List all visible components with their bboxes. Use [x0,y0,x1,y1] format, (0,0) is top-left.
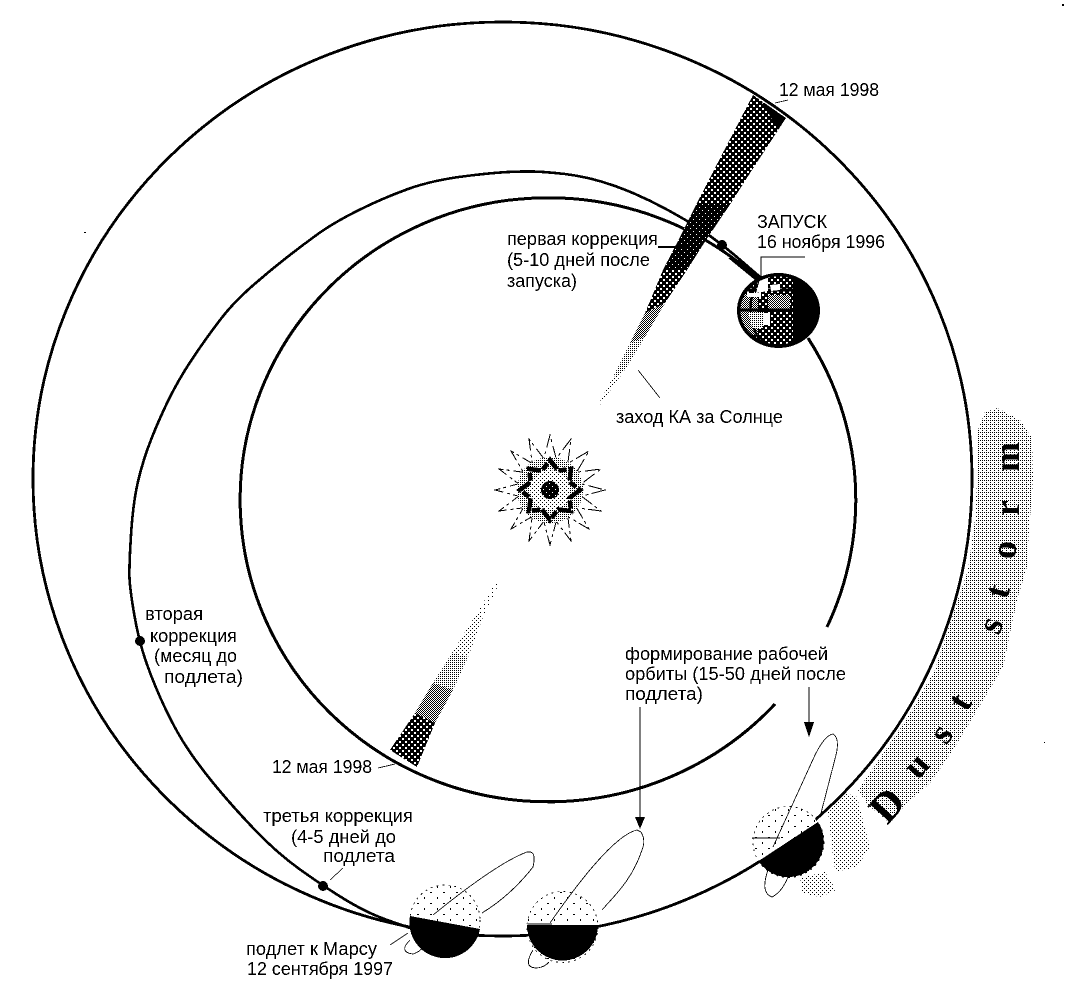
label: Dust storm: m [987,442,1027,472]
Earth orbit [240,198,856,802]
label: working orbit: формирование рабочей [625,644,828,664]
label: first correction: запуска) [507,271,577,291]
icon: Mars with orbit, third position [752,734,837,897]
arrow: working orbit to Mars 2 [635,707,645,829]
marker: third correction [318,881,328,891]
dust storm shading [800,408,1033,897]
label: second correction [145,604,243,687]
label: third correction: (4-5 дней до [291,827,396,847]
label: launch: ЗАПУСК [757,212,827,232]
marker: first correction [717,240,727,250]
label: Dust storm: s [920,716,961,750]
label: first correction [507,229,685,291]
label: Mars arrival: 12 сентября 1997 [247,959,393,979]
label: Dust storm: t [939,686,980,717]
label: Mars arrival [246,933,408,979]
icon: sun [495,435,605,545]
label: passage behind Sun: заход КА за Солнце [616,407,783,427]
label: Dust storm: D [860,779,915,832]
label: passage behind Sun [616,370,783,427]
icon: Mars with orbit, second position [527,830,644,968]
label: Dust storm: s [969,611,1011,639]
solar conjunction band: lower [390,583,499,767]
label: Dust storm: t [976,580,1018,602]
label: second correction: (месяц до [154,646,237,666]
label: working orbit: орбиты (15-50 дней после [625,664,846,684]
label: first correction: первая коррекция [507,229,658,249]
launch wedge where trajectories merge [728,258,760,280]
label: working orbit: подлета) [625,684,703,704]
transfer trajectory [129,171,760,928]
label: date top: 12 мая 1998 [779,80,879,100]
arrow: working orbit to Mars 3 [804,687,814,737]
label: Dust storm: u [894,744,937,786]
label: Dust storm: r [987,500,1027,516]
label: date bottom: 12 мая 1998 [272,757,372,777]
label: Dust storm: o [983,539,1025,560]
label: second correction: вторая [145,604,203,624]
label: working orbit [625,644,846,704]
label: launch: 16 ноября 1996 [757,232,885,252]
marker: second correction [135,636,145,646]
label: second correction: коррекция [150,626,237,646]
solar conjunction band: upper [597,95,786,407]
label: second correction: подлета) [164,667,243,687]
icon: Mars at arrival [405,852,534,958]
label: third correction [263,806,413,880]
label: third correction: подлета [323,846,396,866]
label: Dust storm [860,442,1027,832]
label: Mars arrival: подлет к Марсу [246,939,377,959]
label: first correction: (5-10 дней после [507,250,650,270]
label: launch [757,212,885,277]
icon: Earth [737,272,820,348]
label: third correction: третья коррекция [263,806,413,826]
